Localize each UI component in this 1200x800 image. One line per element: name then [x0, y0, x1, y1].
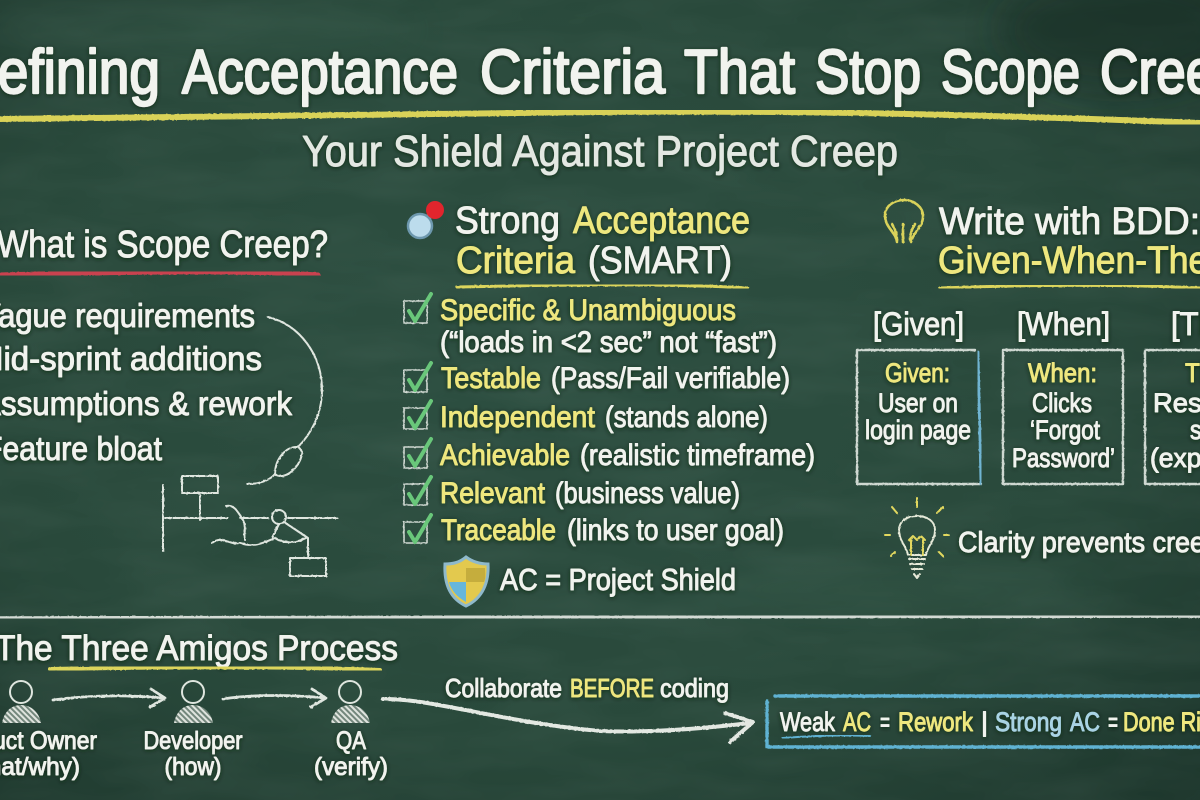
person: product owner	[0, 681, 97, 781]
heading: Write with BDD:	[939, 201, 1200, 243]
title	[0, 38, 1200, 107]
title: That	[684, 38, 795, 107]
column labels	[873, 306, 1200, 342]
heading: Criteria	[456, 240, 576, 282]
heading underline	[457, 285, 748, 288]
connector	[1125, 413, 1144, 415]
horizontal divider	[0, 616, 1200, 618]
collaborate note	[445, 673, 729, 703]
icon: scope creep sketch	[163, 317, 337, 576]
summary box: =	[880, 707, 890, 737]
box: given: User on	[878, 388, 958, 418]
heading	[455, 200, 750, 282]
criteria list: (“loads in <2 sec” not “fast”)	[440, 326, 777, 359]
checkboxes	[404, 294, 431, 543]
shield caption: AC = Project Shield	[500, 562, 736, 597]
criteria list: (realistic timeframe)	[580, 439, 815, 472]
criteria list: Traceable	[441, 514, 556, 547]
box: when: Clicks	[1032, 388, 1092, 418]
summary box: Strong	[995, 707, 1062, 737]
person: QA	[314, 681, 388, 781]
criteria list: Relevant	[440, 477, 546, 510]
title underline	[0, 112, 1200, 123]
arrow: developer to QA	[223, 689, 326, 707]
summary box: Weak	[780, 707, 835, 737]
icon: light bulb	[885, 498, 949, 578]
criteria list: (Pass/Fail verifiable)	[551, 362, 790, 395]
criteria list: (business value)	[555, 477, 740, 510]
panel: what is scope creep	[0, 224, 337, 576]
red underline	[0, 272, 318, 275]
criteria list: Independent	[440, 401, 596, 434]
person: QA: QA	[336, 727, 366, 755]
collaborate note: coding	[660, 673, 729, 703]
subtitle: Your Shield Against Project Creep	[302, 127, 898, 176]
icon: yellow bulb outline	[885, 200, 923, 242]
collaborate note: BEFORE	[570, 673, 654, 703]
title: Scope	[941, 38, 1080, 107]
box: when	[1003, 350, 1123, 484]
arrow: owner to developer	[53, 689, 165, 707]
column labels: [Given]	[873, 306, 964, 342]
collaborate note: Collaborate	[445, 673, 562, 703]
title: Acceptance	[182, 38, 458, 107]
summary box: Rework	[898, 707, 973, 737]
arrow: collaborate to summary	[383, 699, 753, 742]
heading	[938, 201, 1200, 282]
box: when: When:	[1028, 358, 1097, 388]
criteria list: Specific & Unambiguous	[440, 294, 736, 327]
summary box: =	[1108, 707, 1118, 737]
person: developer	[144, 681, 242, 781]
divider: middle and right	[829, 210, 831, 600]
heading underline	[940, 285, 1200, 288]
criteria list: (links to user goal)	[567, 514, 784, 547]
box: given: login page	[865, 415, 971, 445]
person: QA: (verify)	[314, 753, 388, 781]
divider: left and middle	[367, 218, 369, 596]
summary box: |	[981, 707, 988, 737]
box: given	[857, 350, 981, 484]
panel: write with BDD	[857, 200, 1200, 578]
column labels: [When]	[1017, 306, 1110, 342]
criteria list: Testable	[441, 362, 541, 395]
panel: strong acceptance criteria	[404, 200, 815, 606]
heading underline	[50, 667, 380, 670]
summary box: AC	[843, 707, 871, 737]
box: then	[1145, 350, 1200, 484]
box: given: Given:	[885, 358, 950, 388]
box: when: ‘Forgot	[1030, 415, 1100, 445]
criteria list: Achievable	[440, 439, 570, 472]
heading: Acceptance	[573, 200, 750, 242]
person: developer: (how)	[164, 753, 222, 781]
heading: What is Scope Creep?	[0, 224, 328, 266]
summary box	[767, 696, 1200, 747]
title: Stop	[815, 38, 921, 107]
bullet list	[0, 297, 292, 467]
person: developer: Developer	[144, 727, 242, 755]
icon: shield	[445, 557, 488, 606]
criteria list: (stands alone)	[605, 401, 768, 434]
weak AC underline	[783, 736, 870, 738]
title: Criteria	[480, 38, 665, 107]
heading: Strong	[455, 200, 560, 242]
box: when: Password’	[1012, 443, 1115, 473]
heading: The Three Amigos Process	[0, 629, 398, 668]
panel: three amigos	[0, 629, 1200, 781]
criteria list	[440, 294, 815, 547]
icon: pin	[408, 201, 444, 238]
connector	[982, 413, 1003, 415]
summary box: AC	[1070, 707, 1100, 737]
heading: (SMART)	[588, 240, 732, 282]
